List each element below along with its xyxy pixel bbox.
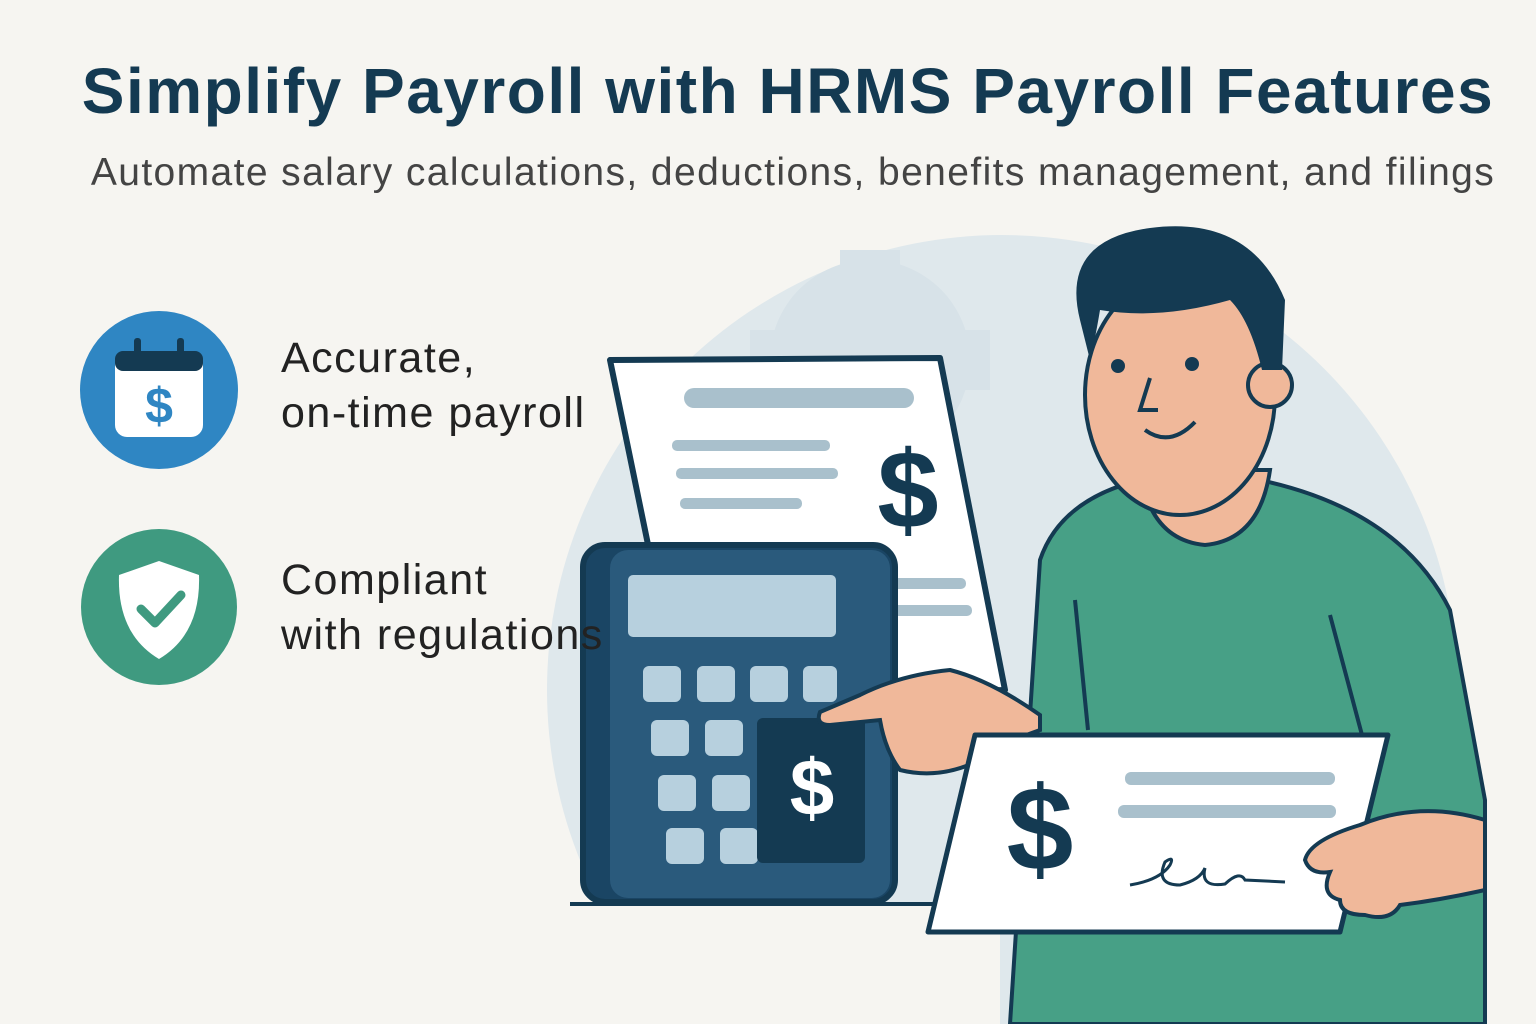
- gear: [750, 250, 990, 460]
- feature text: compliant: with regulations: [281, 611, 604, 659]
- subtitle: Automate salary calculations, deductions, benefits management, and filings: [91, 151, 1495, 194]
- feature text: compliant: [281, 556, 604, 659]
- hand holding cheque: [1305, 811, 1485, 917]
- background illustration: [547, 226, 1487, 1024]
- icon: calendar with dollar: [80, 311, 238, 469]
- cheque: [928, 735, 1388, 932]
- icon: shield check: [81, 529, 237, 685]
- feature text: accurate: Accurate,: [281, 334, 476, 382]
- cheque: $: [1007, 762, 1073, 896]
- feature text: accurate: on-time payroll: [281, 389, 586, 437]
- calculator: [583, 545, 895, 902]
- feature text: compliant: Compliant: [281, 556, 488, 604]
- background circle: [547, 235, 1457, 1024]
- hand pointing: [819, 670, 1040, 773]
- payslip document: [610, 358, 1005, 700]
- feature text: accurate: [281, 334, 586, 437]
- payslip document: $: [877, 429, 939, 552]
- calculator: $: [790, 743, 834, 832]
- person: [1010, 226, 1485, 1024]
- title: Simplify Payroll with HRMS Payroll Features: [82, 55, 1494, 127]
- icon: calendar with dollar: $: [145, 378, 173, 434]
- desk line: [570, 902, 1475, 906]
